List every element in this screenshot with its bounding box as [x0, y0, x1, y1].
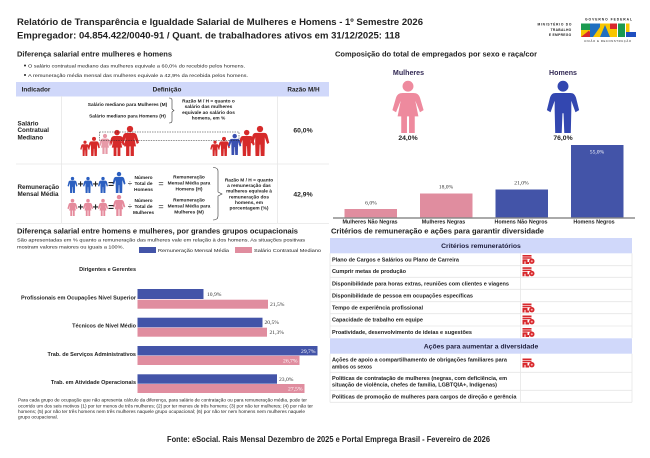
- panel: critérios remuneratórios: [330, 238, 632, 338]
- bullet list: [24, 63, 248, 79]
- panel: tabela de indicadores: Razão M/H: [287, 86, 320, 94]
- nota de rodapé: Para cada grupo de ocupação que não apresenta cálculo da diferença, para salário de contratação ou para remuneração média, pode ter: [18, 398, 308, 402]
- fórmula: mulheres: ÷: [128, 202, 133, 211]
- chave e definição: razão média: [213, 168, 273, 220]
- indicador: remuneração média: Remuneração: [18, 184, 59, 191]
- ícone: ação adotada: [522, 358, 534, 368]
- panel: ações para diversidade: ambos os sexos: [332, 364, 372, 370]
- fórmula: homens: Homens: [134, 187, 153, 193]
- bullet list: A remuneração média mensal das mulheres equivale a 42,9% da recebida pelos homens.: [28, 73, 248, 79]
- chave e definição: razão média: mulheres equivale à: [226, 189, 272, 195]
- nota de rodapé: ocorrido um dos seis motivos (1) por ter menos de três mulheres; (2) por ter menos de três homens; (3) por não ter mulheres; (4) por não ter: [18, 403, 314, 408]
- gráfico de barras horizontais: 21,5%: [270, 302, 285, 308]
- nota de rodapé: grupo ocupacional.: [18, 415, 58, 420]
- pictograma: mediana: [80, 126, 269, 156]
- chave e definição: razão média: a remuneração das: [227, 183, 271, 189]
- panel: critérios remuneratórios: Cumprir metas de produção: [332, 269, 407, 275]
- gráfico de barras verticais: Homens Negros: [573, 220, 615, 226]
- fórmula: homens: +: [93, 180, 99, 190]
- gráfico de barras horizontais: Dirigentes e Gerentes: [79, 267, 136, 273]
- fórmula: homens: [68, 172, 211, 193]
- indicador: remuneração média: Mensal Média: [18, 191, 59, 198]
- heading: critérios: Critérios de remuneração e ações para garantir diversidade: [331, 226, 544, 236]
- panel: critérios remuneratórios: Critérios remuneratórios: [441, 243, 521, 250]
- fórmula: mulheres: Mulheres: [133, 210, 154, 216]
- fórmula: mulheres: Número: [134, 198, 153, 204]
- title: Empregador: 04.854.422/0040-91 / Quant. de trabalhadores ativos em 31/12/2025: 118: [17, 30, 401, 42]
- texto explicativo: [17, 238, 306, 251]
- gráfico de barras verticais: 55,0%: [590, 150, 605, 156]
- gráfico de barras verticais: Mulheres Não Negras: [342, 220, 398, 226]
- chave e definição: razão média: remuneração dos: [229, 195, 269, 201]
- fórmula: homens: Número: [134, 175, 153, 181]
- gráfico de barras verticais: 6,0%: [365, 201, 377, 207]
- definição: salário mediano: equivale ao salário dos: [182, 110, 235, 116]
- chave e definição: razão média: homens, em: [235, 200, 263, 206]
- definição: salário mediano: homens, em %: [192, 116, 226, 122]
- gráfico de barras horizontais: 20,5%: [264, 320, 279, 326]
- title: [17, 17, 423, 42]
- logo: ministério e governo federal: E EMPREGO: [549, 33, 572, 37]
- logo: ministério e governo federal: UNIÃO E RECONSTRUÇÃO: [584, 38, 632, 43]
- indicador: salário contratual: Contratual: [18, 127, 49, 134]
- bullet list: O salário contratual mediano das mulheres equivale a 60,0% do recebido pelos homens.: [28, 63, 245, 69]
- pictograma: homens: 76,0%: [553, 135, 573, 142]
- texto explicativo: mostram valores maiores ou iguais a 100%.: [17, 245, 124, 251]
- gráfico de barras horizontais: 23,0%: [279, 377, 294, 383]
- panel: ações para diversidade: [330, 338, 632, 402]
- panel: critérios remuneratórios: Plano de Cargos e Salários ou Plano de Carreira: [332, 258, 460, 264]
- heading: diferença salarial: Diferença salarial entre mulheres e homens: [17, 50, 172, 58]
- gráfico de barras verticais: Homens Não Negros: [494, 220, 548, 226]
- indicador: salário contratual: [18, 120, 49, 141]
- fórmula: homens: +: [78, 180, 84, 190]
- indicador: remuneração média: [18, 184, 59, 198]
- indicador: salário contratual: Salário: [18, 120, 39, 127]
- pictograma: mulheres: 24,0%: [398, 135, 418, 142]
- panel: ações para diversidade: Políticas de promoção de mulheres para cargos de direção e gerência: [332, 394, 518, 400]
- definição: salário mediano: salário das mulheres: [185, 104, 233, 110]
- chave e definição: razão média: porcentagem (%): [230, 206, 269, 212]
- panel: ações para diversidade: Políticas de contratação de mulheres (negras, com deficiência, em: [332, 376, 507, 382]
- fórmula: mulheres: =: [108, 202, 114, 214]
- fórmula: homens: =: [108, 180, 114, 190]
- definição: salário mediano: Salário mediano para Homens (H): [89, 114, 166, 120]
- texto explicativo: São apresentadas em % quanto a remuneração das mulheres vale em relação à dos homens. As situações positivas: [17, 238, 306, 244]
- razão: 60,0%: 60,0%: [293, 128, 313, 134]
- fórmula: mulheres: Mensal Média para: [168, 204, 211, 210]
- gráfico de barras horizontais: 29,7%: [301, 349, 316, 355]
- title: Relatório de Transparência e Igualdade Salarial de Mulheres e Homens - 1º Semestre 2026: [17, 17, 423, 28]
- logo: ministério e governo federal: GOVERNO FEDERAL: [585, 18, 632, 22]
- fórmula: mulheres: +: [78, 202, 84, 214]
- gráfico de barras horizontais: 21,3%: [270, 330, 284, 336]
- heading: composição: Composição do total de empregados por sexo e raça/cor: [335, 50, 537, 58]
- gráfico de barras horizontais: 27,5%: [288, 386, 303, 392]
- panel: critérios remuneratórios: Disponibilidade para horas extras, reuniões com clientes e viagens: [332, 282, 509, 288]
- panel: critérios remuneratórios: Disponibilidade de pessoa em ocupações específicas: [332, 294, 473, 300]
- gráfico de barras horizontais: Trab. de Serviços Administrativos: [48, 352, 136, 358]
- heading: grupos ocupacionais: Diferença salarial entre homens e mulheres, por grandes grupos ocupacionais: [17, 226, 298, 236]
- logo: ministério e governo federal: MINISTÉRIO DO: [538, 21, 572, 26]
- panel: ações para diversidade: situação de violência, chefes de família, LGBTQIA+, Indígenas): [332, 383, 497, 389]
- definição: salário mediano: Razão M / H = quanto o: [182, 98, 235, 104]
- indicador: salário contratual: Mediano: [18, 134, 43, 141]
- gráfico de barras verticais: [333, 145, 635, 226]
- fórmula: mulheres: =: [158, 202, 164, 212]
- gráfico de barras verticais: 21,0%: [514, 181, 529, 187]
- gráfico de barras verticais: 18,0%: [439, 185, 454, 191]
- panel: critérios remuneratórios: Proatividade, desenvolvimento de ideias e sugestões: [332, 330, 472, 336]
- ícones: critérios adotados: [522, 255, 534, 337]
- legenda: Salário Contratual Mediano: [254, 248, 321, 254]
- gráfico de barras horizontais: 10,9%: [207, 292, 222, 298]
- gráfico de barras horizontais: Trab. em Atividade Operacionais: [51, 380, 136, 386]
- legenda: Remuneração Mensal Média: [158, 248, 229, 254]
- legenda: [139, 247, 321, 254]
- panel: critérios remuneratórios: Tempo de experiência profissional: [332, 306, 424, 312]
- fórmula: mulheres: [67, 195, 211, 216]
- logo: ministério e governo federal: [538, 18, 636, 43]
- gráfico de barras horizontais: 26,7%: [283, 358, 298, 364]
- panel: tabela de indicadores: [16, 82, 329, 224]
- fórmula: homens: =: [158, 178, 164, 188]
- fórmula: mulheres: +: [93, 202, 99, 214]
- nota de rodapé: homens; (5) por não ter três homens nem três mulheres naquele grupo ocupacional; (6) por não ter nem homens nem mulheres naquele: [18, 409, 306, 414]
- logo: ministério e governo federal: TRABALHO: [551, 28, 572, 32]
- panel: tabela de indicadores: Definição: [153, 86, 181, 94]
- fórmula: homens: Total de: [134, 181, 153, 187]
- panel: critérios remuneratórios: Capacidade de trabalho em equipe: [332, 318, 423, 324]
- definição: salário mediano: Salário mediano para Mulheres (M): [88, 102, 168, 108]
- definição: salário mediano: [88, 98, 235, 123]
- pictograma: mulheres: Mulheres: [393, 69, 424, 77]
- panel: ações para diversidade: Ações para aumentar a diversidade: [424, 344, 538, 350]
- nota de rodapé: [18, 398, 314, 420]
- gráfico de barras horizontais: Profissionais em Ocupações Nível Superior: [21, 296, 137, 302]
- panel: ações para diversidade: Ações de apoio a compartilhamento de obrigações familiares para: [332, 358, 508, 364]
- fórmula: homens: Remuneração: [173, 174, 205, 180]
- fonte: Fonte: eSocial. Rais Mensal Dezembro de 2025 e Portal Emprega Brasil - Fevereiro de 2026: [167, 435, 491, 444]
- pictograma: mulheres: [392, 69, 424, 142]
- panel: tabela de indicadores: Indicador: [22, 86, 51, 94]
- pictograma: homens: [547, 69, 579, 142]
- fórmula: mulheres: Remuneração: [173, 198, 205, 204]
- chave e definição: razão média: Razão M / H = quanto: [225, 178, 273, 184]
- gráfico de barras horizontais: Técnicos de Nível Médio: [72, 324, 137, 330]
- fórmula: homens: ÷: [128, 179, 133, 188]
- pictograma: homens: Homens: [549, 69, 577, 77]
- razão: 42,9%: 42,9%: [293, 192, 313, 198]
- fórmula: homens: Mensal Média para: [168, 180, 211, 186]
- gráfico de barras verticais: Mulheres Negras: [422, 220, 465, 226]
- fórmula: homens: Homens (H): [176, 186, 203, 192]
- fórmula: mulheres: Total de: [134, 204, 153, 210]
- gráfico de barras horizontais: [21, 267, 318, 393]
- fórmula: mulheres: Mulheres (M): [174, 210, 204, 216]
